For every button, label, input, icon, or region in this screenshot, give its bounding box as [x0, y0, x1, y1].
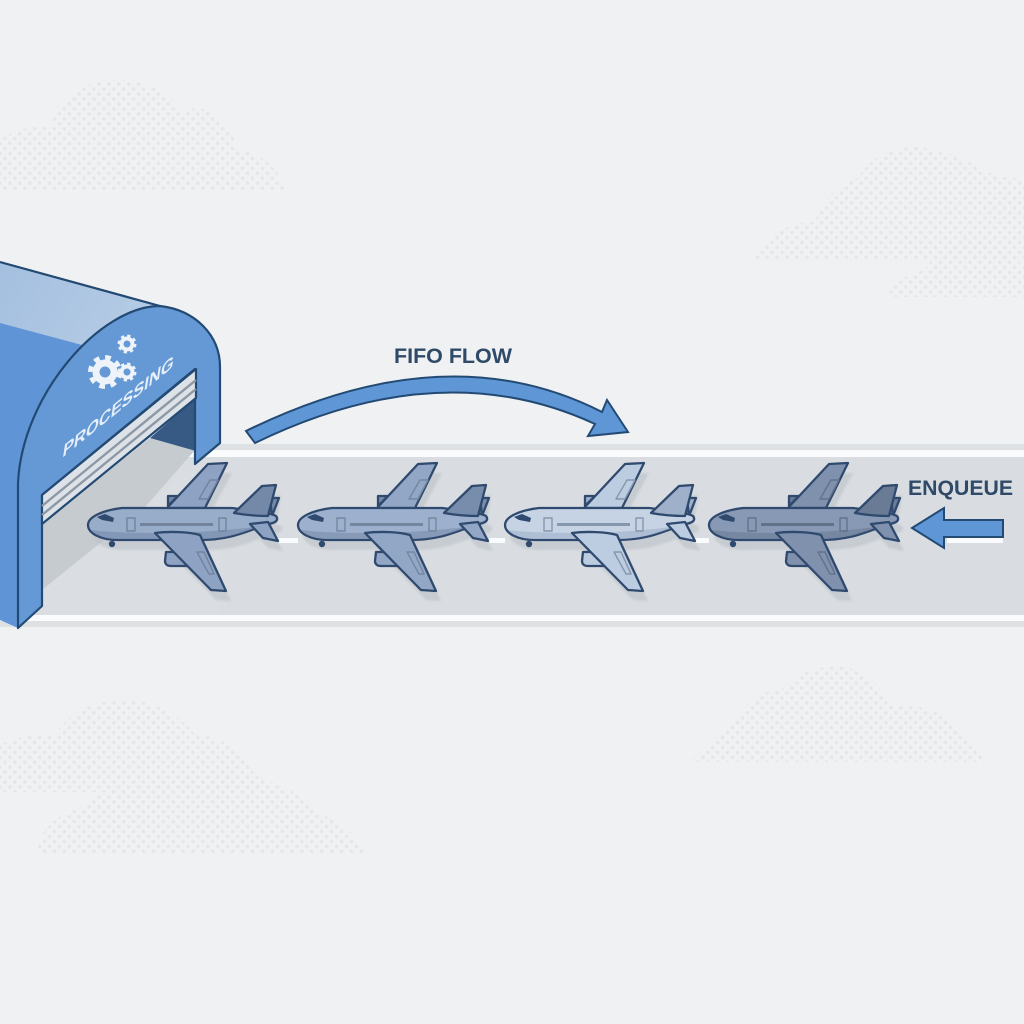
cloud: lower left: [0, 700, 262, 792]
hangar front arch: [18, 306, 220, 628]
label: ENQUEUE: ENQUEUE: [908, 477, 1013, 500]
roller door: [42, 369, 196, 524]
cloud: bottom left: [37, 770, 366, 853]
runway: [0, 444, 1024, 627]
icon: gears: [90, 336, 135, 386]
hangar interior: [42, 438, 195, 590]
label: PROCESSING: PROCESSING: [61, 351, 175, 463]
arrow: enqueue: [912, 508, 1003, 548]
cloud: upper left: [0, 80, 285, 190]
cloud: upper right: [754, 147, 1024, 261]
hangar roof highlight: [0, 263, 160, 345]
arrow: FIFO flow: [246, 376, 628, 443]
plane 4: [709, 463, 904, 601]
cloud: far right: [888, 242, 1024, 297]
plane 3: [505, 463, 700, 601]
plane 1: [88, 463, 283, 601]
plane 2: [298, 463, 493, 601]
hangar: [0, 262, 220, 628]
heading: FIFO FLOW: FIFO FLOW: [394, 345, 512, 368]
cloud: lower right: [690, 666, 985, 762]
hangar side wall: [0, 262, 160, 628]
